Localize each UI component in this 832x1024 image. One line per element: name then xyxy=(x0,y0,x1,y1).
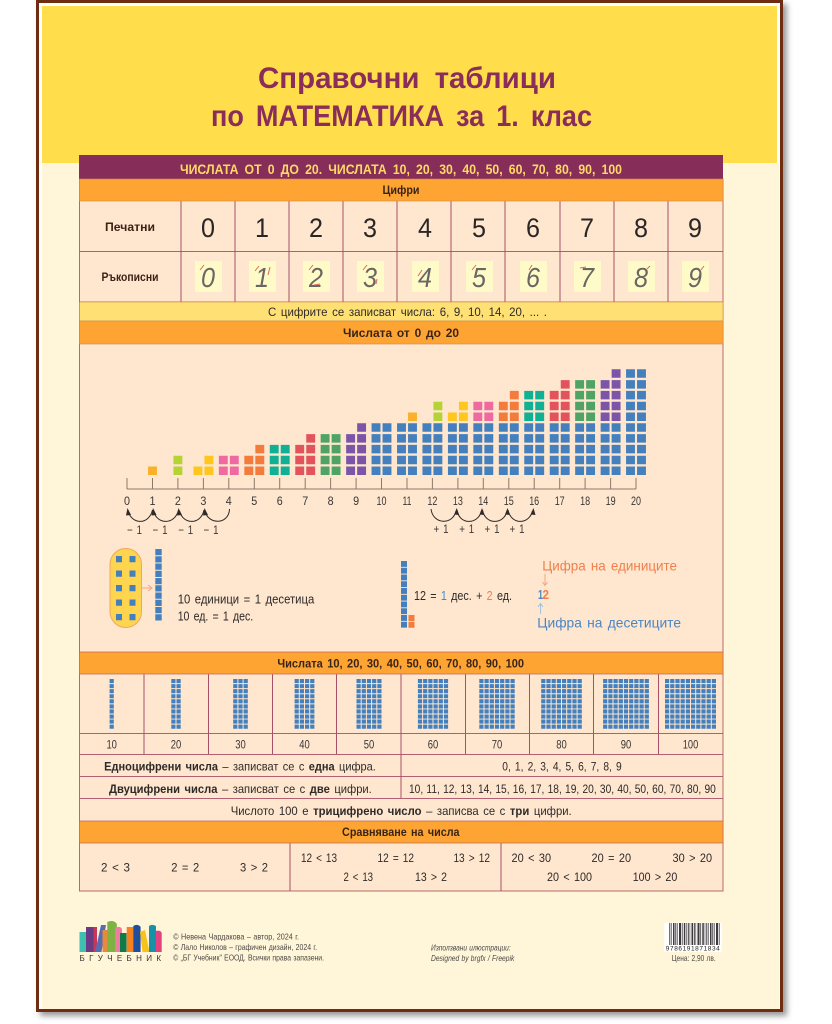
row: handwritten digits: 6 xyxy=(526,262,540,293)
copyright text: © Невена Чардакова – автор, 2024 г. xyxy=(173,931,299,941)
callout: digit places of twelve: Цифра на единиците xyxy=(542,558,677,574)
comparisons: one-digit: 2 < 3 xyxy=(101,860,130,874)
row: printed digits: 2 xyxy=(309,213,323,243)
callout: digit places of twelve: Цифра на десетиците xyxy=(537,615,681,631)
arrows: plus one jumps: + 1 xyxy=(484,522,500,536)
row: printed digits: 4 xyxy=(418,213,432,243)
comparisons: round tens: 20 = 20 xyxy=(592,851,631,865)
title xyxy=(211,62,592,133)
number line xyxy=(124,478,641,508)
row: printed digits xyxy=(105,213,702,243)
callout: digit places of twelve: 1 xyxy=(538,587,543,602)
arrows: plus one jumps: + 1 xyxy=(434,522,449,536)
price: Цена: 2,90 лв. xyxy=(672,953,716,963)
arrows: plus one jumps: + 1 xyxy=(510,522,525,536)
number line: 10 xyxy=(376,494,387,508)
number line: 0 xyxy=(124,494,130,508)
row: two-digit numbers: 10, 11, 12, 13, 14, 15, 16, 17, 18, 19, 20, 30, 40, 50, 60, 70, 80, 90 xyxy=(409,782,716,796)
row: printed digits: 1 xyxy=(255,213,269,243)
text: ten units equals one ten: 10 ед. = 1 дес. xyxy=(178,610,253,624)
row: handwritten digits: 8 xyxy=(634,262,648,293)
labels: tens: 40 xyxy=(299,738,310,752)
barcode xyxy=(664,923,722,952)
comparisons: one-digit xyxy=(101,860,268,874)
row: two-digit numbers: Двуцифрени числа – записват се с две цифри. xyxy=(109,782,372,796)
row: printed digits: Печатни xyxy=(105,220,155,234)
row: printed digits: 6 xyxy=(526,213,540,243)
arrows: plus one jumps xyxy=(431,508,536,536)
row: handwritten digits: 2 xyxy=(308,262,323,293)
comparisons: up to twenty xyxy=(301,851,490,884)
comparisons: round tens: 30 > 20 xyxy=(673,851,712,865)
comparisons: round tens: 20 < 30 xyxy=(512,851,551,865)
logo: books publisher: БГУЧЕБНИК xyxy=(80,954,161,963)
main heading bar: ЧИСЛАТА ОТ 0 ДО 20. ЧИСЛАТА 10, 20, 30, 40, 50, 60, 70, 80, 90, 100 xyxy=(180,162,622,177)
number line: 11 xyxy=(402,494,412,508)
illustration credits: Designed by brgfx / Freepik xyxy=(431,953,515,963)
number line: 20 xyxy=(631,494,641,508)
text: ten units equals one ten: 10 единици = 1 десетица xyxy=(178,592,314,606)
row: handwritten digits: 7 xyxy=(580,262,595,293)
row: printed digits: 5 xyxy=(472,213,486,243)
number line: 13 xyxy=(453,494,463,508)
section heading: digits xyxy=(80,179,723,201)
arrows: minus one jumps: − 1 xyxy=(127,523,142,537)
row: two-digit numbers xyxy=(109,782,716,796)
block chart: numbers 1 to 20 xyxy=(152,369,642,475)
row: handwritten digits: 0 xyxy=(201,262,215,293)
number line: 14 xyxy=(478,494,489,508)
comparisons: up to twenty: 13 > 12 xyxy=(453,851,490,865)
section heading: comparing numbers xyxy=(80,821,723,843)
row: handwritten digits xyxy=(102,261,709,293)
row: printed digits: 3 xyxy=(363,213,377,243)
illustration: twelve as blocks xyxy=(404,561,414,628)
labels: tens: 50 xyxy=(364,738,374,752)
main heading bar xyxy=(79,155,723,179)
labels: tens: 30 xyxy=(235,738,246,752)
row: printed digits: 0 xyxy=(201,213,215,243)
comparisons: one-digit: 3 > 2 xyxy=(240,860,268,874)
section heading: comparing numbers: Сравняване на числа xyxy=(342,825,460,839)
labels: tens: 70 xyxy=(492,738,502,752)
callout: digit places of twelve: 2 xyxy=(542,587,549,602)
number line: 17 xyxy=(555,494,565,508)
comparisons: round tens xyxy=(512,851,712,884)
row: handwritten digits: 1 xyxy=(255,262,269,293)
logo: books publisher xyxy=(80,921,162,963)
labels: tens: 100 xyxy=(683,738,698,752)
main table background and grid xyxy=(79,179,723,891)
row: handwritten digits: Ръкописни xyxy=(102,270,158,284)
arrows: plus one jumps: + 1 xyxy=(459,522,474,536)
comparisons: round tens: 100 > 20 xyxy=(633,870,678,884)
row: one-digit numbers xyxy=(104,760,622,774)
number line: 5 xyxy=(251,494,258,508)
section heading: round tens: Числата 10, 20, 30, 40, 50, 60, 70, 80, 90, 100 xyxy=(277,657,524,671)
row: printed digits: 8 xyxy=(634,213,648,243)
title: по МАТЕМАТИКА за 1. клас xyxy=(211,100,592,133)
number line: 3 xyxy=(200,494,207,508)
barcode: 9786191871834 xyxy=(666,946,720,952)
copyright text xyxy=(173,931,324,963)
number line: 12 xyxy=(427,494,438,508)
number line: 16 xyxy=(529,494,539,508)
comparisons: up to twenty: 2 < 13 xyxy=(344,870,373,884)
labels: tens: 20 xyxy=(171,738,181,752)
row: printed digits: 9 xyxy=(688,213,702,243)
number line: 19 xyxy=(606,494,616,508)
row: three-digit number: Числото 100 е трицифрено число – записва се с три цифри. xyxy=(231,804,572,818)
title: Справочни таблици xyxy=(258,62,556,95)
comparisons: up to twenty: 12 < 13 xyxy=(301,851,337,865)
row: one-digit numbers: Едноцифрени числа – записват се с една цифра. xyxy=(104,760,376,774)
arrows: minus one jumps: − 1 xyxy=(204,523,219,537)
number line: 2 xyxy=(175,494,181,508)
number line: 1 xyxy=(150,494,156,508)
labels: tens: 80 xyxy=(556,738,567,752)
row: handwritten digits: 3 xyxy=(363,262,377,293)
number line: 6 xyxy=(277,494,283,508)
row: handwritten digits: 9 xyxy=(688,262,702,293)
note row: digits form numbers xyxy=(80,302,723,321)
illustration credits xyxy=(431,943,515,963)
illustration credits: Използвани илюстрации: xyxy=(431,943,511,953)
text: twelve decomposition: 12 = 1 дес. + 2 ед. xyxy=(414,589,512,603)
section heading: digits: Цифри xyxy=(382,183,420,197)
arrows: minus one jumps xyxy=(126,508,230,537)
row: handwritten digits: 4 xyxy=(418,262,432,293)
number line: 9 xyxy=(353,494,359,508)
number line: 7 xyxy=(302,494,308,508)
labels: tens: 60 xyxy=(428,738,438,752)
row: one-digit numbers: 0, 1, 2, 3, 4, 5, 6, 7, 8, 9 xyxy=(502,760,622,774)
number line: 4 xyxy=(226,494,232,508)
section heading: numbers 0 to 20 xyxy=(80,321,723,344)
number line: 18 xyxy=(580,494,590,508)
labels: tens: 90 xyxy=(621,738,631,752)
number line: 15 xyxy=(504,494,514,508)
row: printed digits: 7 xyxy=(580,213,594,243)
comparisons: round tens: 20 < 100 xyxy=(547,870,592,884)
number line: 8 xyxy=(328,494,334,508)
comparisons: one-digit: 2 = 2 xyxy=(171,860,199,874)
comparisons: up to twenty: 12 = 12 xyxy=(378,851,414,865)
block grids: tens xyxy=(112,679,714,729)
note row: digits form numbers: С цифрите се записват числа: 6, 9, 10, 14, 20, ... . xyxy=(268,305,547,319)
text: ten units equals one ten xyxy=(178,592,314,624)
labels: tens xyxy=(106,738,698,752)
arrows: minus one jumps: − 1 xyxy=(178,523,193,537)
labels: tens: 10 xyxy=(106,738,117,752)
row: handwritten digits: 5 xyxy=(472,262,486,293)
section heading: round tens xyxy=(80,652,723,674)
callout: digit places of twelve xyxy=(537,558,681,631)
illustration: ten units make one ten xyxy=(110,548,158,628)
section heading: numbers 0 to 20: Числата от 0 до 20 xyxy=(343,326,459,340)
arrows: minus one jumps: − 1 xyxy=(152,523,168,537)
comparisons: up to twenty: 13 > 2 xyxy=(415,870,447,884)
copyright text: © Лало Николов – графичен дизайн, 2024 г. xyxy=(173,942,317,952)
copyright text: © „БГ Учебник" ЕООД. Всички права запазени. xyxy=(173,953,324,963)
